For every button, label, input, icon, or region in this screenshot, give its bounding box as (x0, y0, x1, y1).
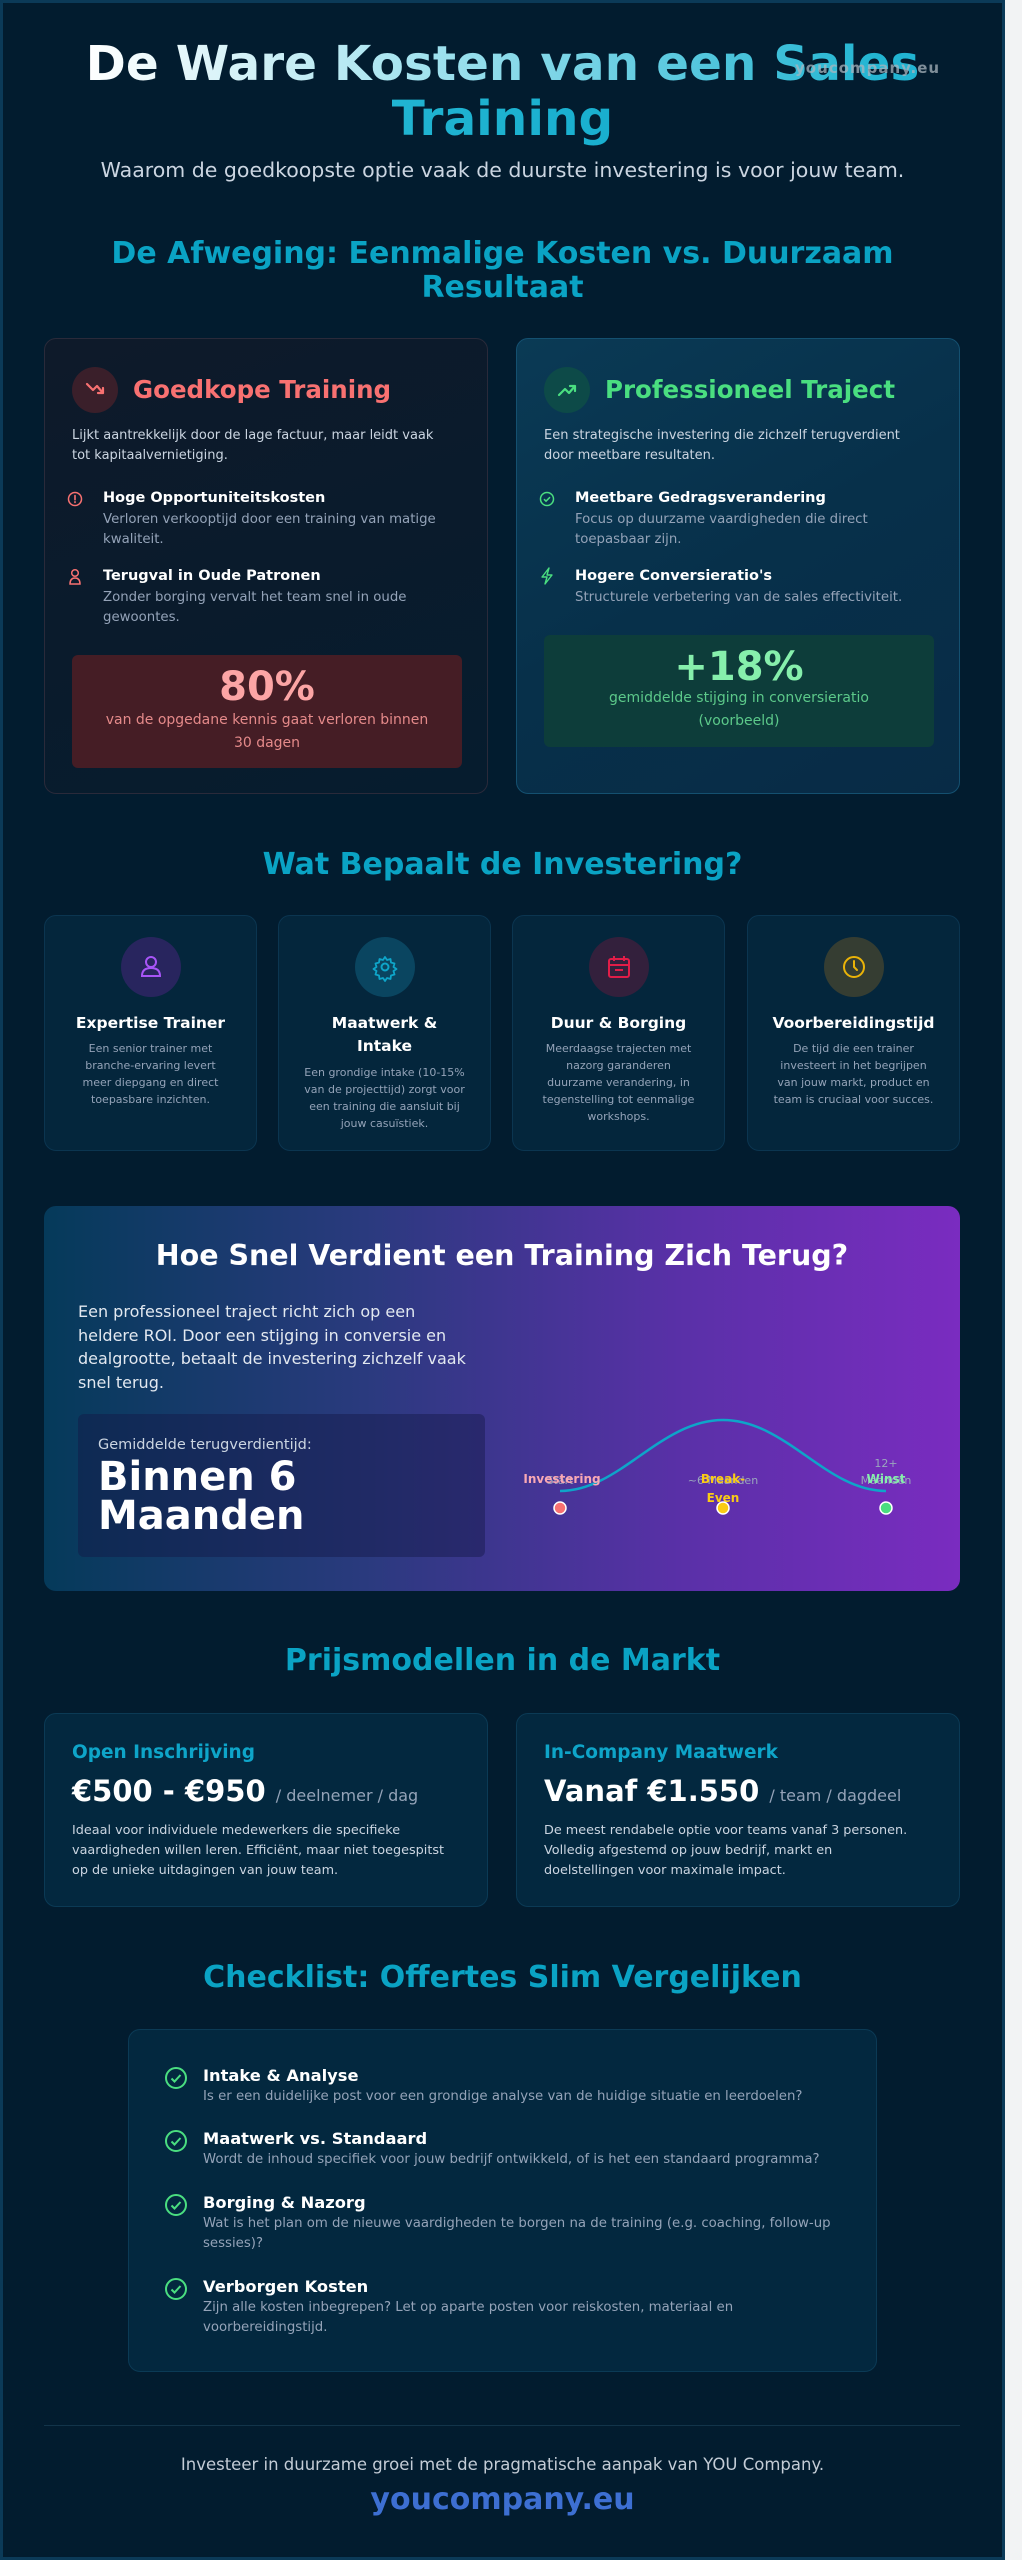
factor text: De tijd die een trainer (793, 1042, 914, 1055)
roi paragraph: snel terug. (78, 1372, 164, 1392)
factor text: toepasbare inzichten. (91, 1093, 210, 1106)
panel: in-company: De meest rendabele optie voor teams vanaf 3 personen. (544, 1823, 907, 1838)
check item 3: sessies)? (203, 2236, 263, 2251)
item: terugval: gewoontes. (103, 610, 180, 625)
chart: break-even (523, 1418, 911, 1515)
check item 3: Wat is het plan om de nieuwe vaardigheden te borgen na de training (e.g. coaching, follow-up (203, 2216, 831, 2231)
chart: break-even: Break- (701, 1472, 745, 1486)
check item 1: Intake & Analyse (203, 2066, 358, 2085)
item: gedragsverandering: toepasbaar zijn. (575, 532, 682, 547)
roi paragraph: Een professioneel traject richt zich op een (78, 1302, 415, 1321)
card description: Lijkt aantrekkelijk door de lage factuur, maar leidt vaak (72, 428, 433, 443)
factor text (83, 1042, 218, 1106)
icon: trend up (544, 367, 590, 413)
panel: professioneel traject (516, 338, 960, 794)
check item 4 (165, 2277, 733, 2335)
heading: checklist: Checklist: Offertes Slim Vergelijken (203, 1960, 802, 1995)
chart: break-even: Start (547, 1474, 574, 1487)
item: opportuniteitskosten: Verloren verkooptijd door een training van matige (103, 512, 436, 527)
check item 1 (165, 2066, 802, 2104)
heading: investering: Wat Bepaalt de Investering? (263, 847, 742, 882)
card description (72, 428, 434, 463)
panel: open inschrijving: Ideaal voor individuele medewerkers die specifieke (72, 1823, 400, 1838)
roi paragraph: heldere ROI. Door een stijging in conversie en (78, 1326, 446, 1344)
footer brand: youcompany.eu (370, 2482, 635, 2517)
factor text: workshops. (587, 1110, 650, 1123)
icon: calendar (589, 937, 649, 997)
heading: afweging: De Afweging: Eenmalige Kosten vs. Duurzaam (111, 236, 894, 271)
panel: open inschrijving: vaardigheden willen leren. Efficiënt, maar niet toegespitst (72, 1843, 444, 1858)
heading: afweging (111, 236, 894, 305)
item: conversieratio: Structurele verbetering van de sales effectiviteit. (575, 590, 902, 605)
factor title (332, 1014, 437, 1055)
price: €500 - €950 / deelnemer / dag (72, 1774, 418, 1808)
subtitle: Waarom de goedkoopste optie vaak de duurste investering is voor jouw team. (101, 158, 904, 182)
panel: checklist (128, 2029, 877, 2372)
panel: maatwerk intake (278, 915, 491, 1151)
panel: open inschrijving: op de unieke uitdagingen van jouw team. (72, 1863, 338, 1878)
check item 4: Verborgen Kosten (203, 2277, 368, 2296)
factor text: Een grondige intake (10-15% (304, 1066, 465, 1079)
price: Vanaf €1.550 / team / dagdeel (544, 1774, 901, 1808)
panel: duur borging (512, 915, 725, 1151)
roi paragraph: dealgrootte, betaalt de investering zichzelf vaak (78, 1349, 466, 1368)
factor text: team is cruciaal voor succes. (774, 1093, 933, 1106)
stat: 80%: 30 dagen (234, 735, 300, 751)
payback box (78, 1414, 485, 1557)
factor text (542, 1042, 694, 1123)
card description: door meetbare resultaten. (544, 448, 715, 463)
heading: prijsmodellen: Prijsmodellen in de Markt (285, 1643, 720, 1678)
watermark: youcompany.eu (795, 59, 940, 77)
check item 4: voorbereidingstijd. (203, 2320, 327, 2335)
heading: afweging: Resultaat (421, 270, 584, 305)
item: terugval: Zonder borging vervalt het team snel in oude (103, 590, 406, 605)
factor text: branche-ervaring levert (85, 1059, 216, 1072)
check item 4: Zijn alle kosten inbegrepen? Let op aparte posten voor reiskosten, materiaal en (203, 2300, 733, 2315)
stat: +18% (544, 635, 934, 747)
item: terugval: Terugval in Oude Patronen (103, 568, 321, 584)
item: opportuniteitskosten: Hoge Opportuniteitskosten (103, 490, 325, 506)
card description: tot kapitaalvernietiging. (72, 448, 228, 463)
card description (544, 428, 900, 463)
check item 3: Borging & Nazorg (203, 2193, 366, 2212)
panel: expertise trainer (44, 915, 257, 1151)
check item 1: Is er een duidelijke post voor een grondige analyse van de huidige situatie en leerdoelen? (203, 2089, 802, 2104)
roi title: Hoe Snel Verdient een Training Zich Terug? (156, 1239, 848, 1272)
factor text: duurzame verandering, in (547, 1076, 690, 1089)
factor text: een training die aansluit bij (309, 1100, 460, 1113)
stat: +18%: gemiddelde stijging in conversieratio (609, 690, 869, 706)
factor text: jouw casuïstiek. (341, 1117, 428, 1130)
item: gedragsverandering (540, 490, 868, 547)
factor text (774, 1042, 933, 1106)
stat: +18%: +18% (674, 644, 804, 690)
icon: gear (355, 937, 415, 997)
item: opportuniteitskosten: kwaliteit. (103, 532, 164, 547)
item: gedragsverandering: Meetbare Gedragsverandering (575, 490, 826, 506)
panel: in-company: Volledig afgestemd op jouw bedrijf, markt en (544, 1843, 832, 1858)
footer text: Investeer in duurzame groei met de pragmatische aanpak van YOU Company. (181, 2455, 824, 2474)
factor text: Een senior trainer met (89, 1042, 212, 1055)
chart: break-even: ~6 Maanden (688, 1474, 758, 1487)
factor text: Meerdaagse trajecten met (546, 1042, 691, 1055)
panel: voorbereidingstijd (747, 915, 960, 1151)
card title: Goedkope Training (133, 375, 391, 404)
check item 2 (165, 2129, 820, 2167)
item: opportuniteitskosten (68, 490, 436, 547)
payback box: Maanden (98, 1493, 305, 1539)
factor text: meer diepgang en direct (83, 1076, 218, 1089)
chart: break-even: 12+ (874, 1457, 898, 1470)
factor title: Maatwerk & (332, 1014, 437, 1032)
chart: break-even: Maanden (861, 1474, 911, 1487)
factor text: van jouw markt, product en (777, 1076, 930, 1089)
stat: 80%: van de opgedane kennis gaat verloren binnen (106, 712, 428, 728)
item: conversieratio (541, 567, 902, 605)
icon: trend down (72, 367, 118, 413)
panel: goedkope training (44, 338, 488, 794)
factor text: van de projecttijd) zorgt voor (304, 1083, 465, 1096)
chart: break-even: Investering (523, 1472, 601, 1486)
panel: in-company: In-Company Maatwerk (544, 1742, 778, 1763)
factor text: investeert in het begrijpen (780, 1059, 927, 1072)
item: terugval (69, 568, 406, 625)
roi paragraph (78, 1302, 466, 1392)
factor text: nazorg garanderen (566, 1059, 671, 1072)
panel: in-company (516, 1713, 960, 1907)
payback box: Binnen 6 (98, 1454, 297, 1500)
factor title: Intake (357, 1037, 412, 1055)
factor title: Expertise Trainer (76, 1014, 225, 1032)
panel: open inschrijving (44, 1713, 488, 1907)
check item 3 (165, 2193, 831, 2251)
chart: break-even: Even (707, 1491, 739, 1505)
stat: 80%: 80% (219, 664, 315, 710)
payback box: Gemiddelde terugverdientijd: (98, 1437, 312, 1453)
chart: break-even: Winst (867, 1472, 906, 1486)
factor text: tegenstelling tot eenmalige (543, 1093, 694, 1106)
factor text (304, 1066, 465, 1130)
check item 2: Maatwerk vs. Standaard (203, 2129, 427, 2148)
icon: clock (824, 937, 884, 997)
item: gedragsverandering: Focus op duurzame vaardigheden die direct (575, 512, 868, 527)
stat: 80% (72, 655, 462, 768)
title: Training (392, 91, 613, 147)
item: conversieratio: Hogere Conversieratio's (575, 568, 772, 584)
icon: person (121, 937, 181, 997)
title (86, 36, 919, 147)
panel: roi (44, 1206, 960, 1591)
factor title: Voorbereidingstijd (772, 1014, 935, 1032)
panel: in-company: doelstellingen voor maximale impact. (544, 1863, 786, 1878)
card title: Professioneel Traject (605, 375, 895, 404)
card description: Een strategische investering die zichzelf terugverdient (544, 428, 900, 443)
title: De Ware Kosten van een Sales (86, 36, 919, 92)
factor title: Duur & Borging (551, 1014, 686, 1032)
check item 2: Wordt de inhoud specifiek voor jouw bedrijf ontwikkeld, of is het een standaard programma? (203, 2152, 820, 2167)
stat: +18%: (voorbeeld) (698, 713, 780, 729)
panel: open inschrijving: Open Inschrijving (72, 1742, 255, 1763)
